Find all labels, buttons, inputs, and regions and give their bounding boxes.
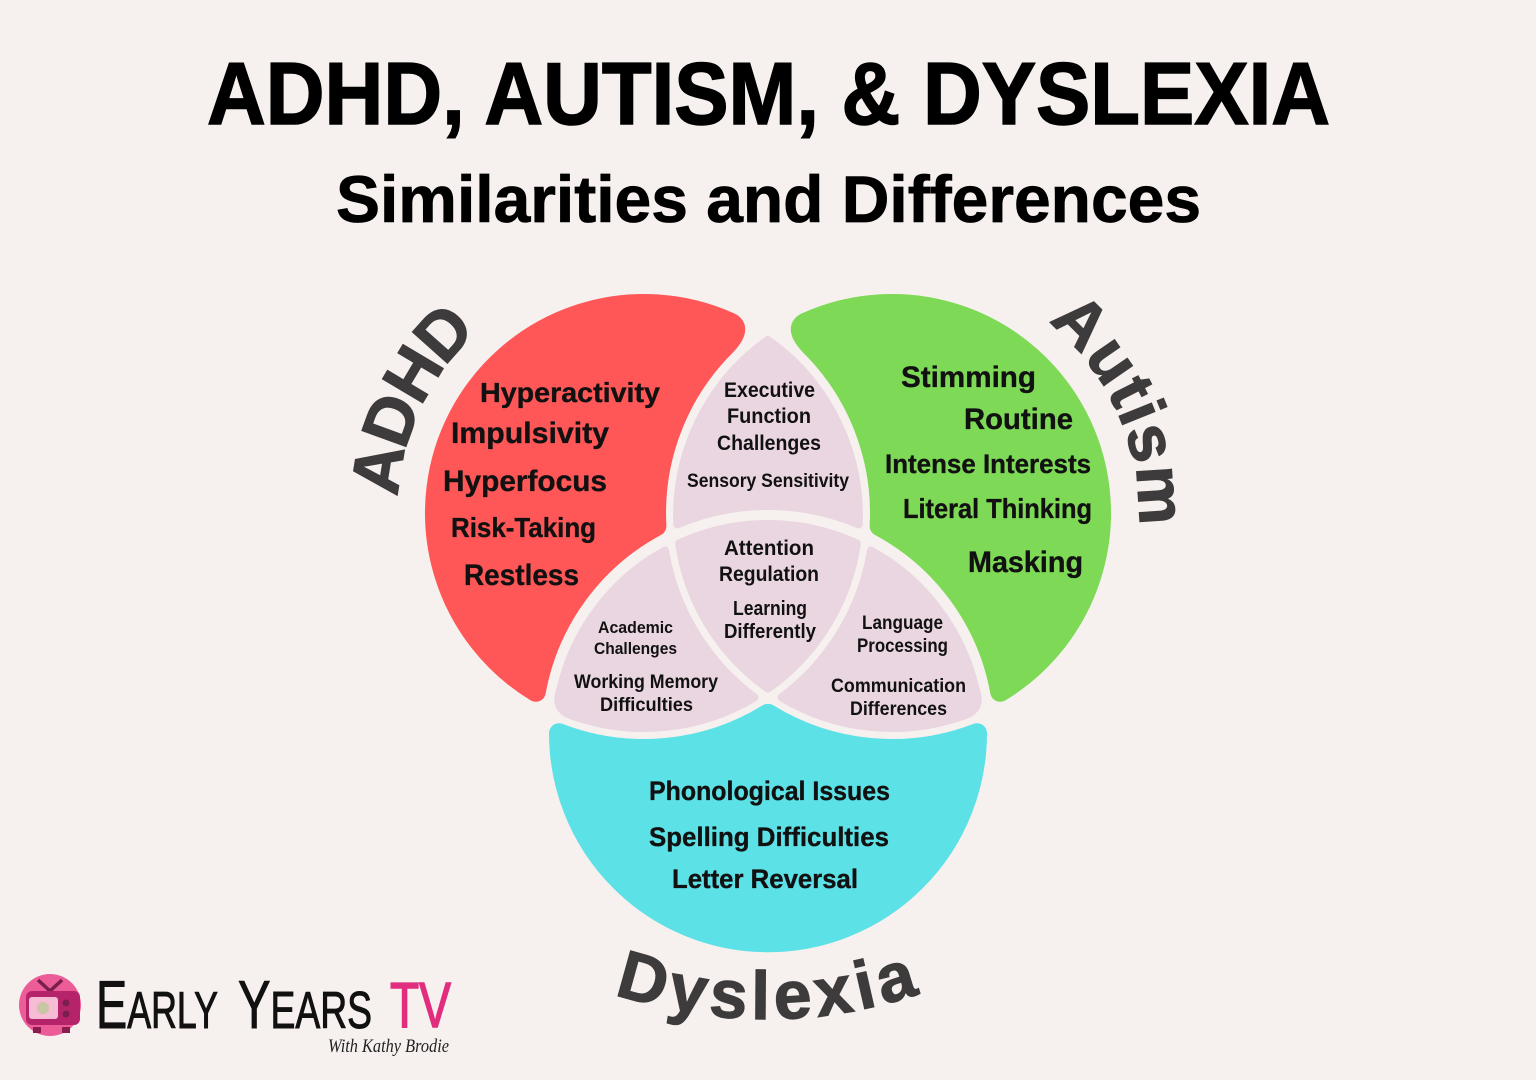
text block: Autism traits: [885, 361, 1092, 579]
subtitle: Similarities and Differences: [336, 162, 1201, 236]
text block: Dyslexia traits: Phonological Issues: [649, 776, 890, 806]
curved label: Dyslexia: Dyslexia: [617, 950, 921, 1026]
text block: ADHD and Autism overlap: Challenges: [717, 432, 821, 455]
tagline: With Kathy Brodie: [328, 1036, 449, 1057]
text block: ADHD traits: [443, 377, 660, 592]
text block: Dyslexia traits: [649, 776, 890, 894]
overlap: ADHD and Dyslexia: [558, 550, 754, 728]
overlap: all three: [679, 524, 857, 689]
text block: Dyslexia traits: Letter Reversal: [672, 864, 858, 894]
text block: shared by all three: Learning: [733, 598, 807, 620]
text block: ADHD and Dyslexia overlap: Difficulties: [600, 695, 693, 716]
overlap: Autism and Dyslexia: [782, 550, 978, 728]
text block: ADHD and Dyslexia overlap: Challenges: [594, 639, 677, 658]
overlap: ADHD and Autism: [677, 340, 859, 524]
text block: ADHD traits: Impulsivity: [451, 417, 609, 450]
panel: Dyslexia circle: [559, 714, 977, 942]
text block: ADHD and Autism overlap: Function: [727, 405, 811, 428]
text block: ADHD and Dyslexia overlap: Working Memory: [574, 672, 718, 693]
text block: Autism traits: Stimming: [901, 361, 1036, 394]
text block: shared by all three: Attention: [724, 537, 814, 560]
text block: Autism and Dyslexia overlap: Language: [862, 613, 943, 634]
text block: ADHD and Dyslexia overlap: Academic: [598, 618, 673, 637]
text block: shared by all three: Regulation: [719, 563, 819, 586]
text block: Autism and Dyslexia overlap: Differences: [850, 699, 947, 720]
text block: ADHD and Autism overlap: [687, 379, 849, 492]
panel: ADHD circle: [435, 304, 735, 692]
title: ADHD, AUTISM, & DYSLEXIA: [207, 44, 1330, 143]
text block: Autism and Dyslexia overlap: Processing: [857, 636, 948, 657]
text block: ADHD traits: Restless: [464, 559, 579, 592]
text block: ADHD and Autism overlap: Executive: [724, 379, 815, 402]
text block: Autism traits: Routine: [964, 403, 1073, 436]
text block: ADHD and Dyslexia overlap: [574, 618, 718, 716]
logo: Early Years TV: [19, 967, 451, 1057]
text block: shared by all three: [719, 537, 819, 643]
text block: Autism and Dyslexia overlap: Communication: [831, 676, 966, 697]
panel: Autism circle: [801, 304, 1101, 692]
text block: shared by all three: Differently: [724, 621, 817, 643]
text block: Dyslexia traits: Spelling Difficulties: [649, 822, 889, 852]
wordmark: TV: TV: [390, 969, 451, 1041]
curved label: Autism: Autism: [1049, 301, 1176, 522]
curved label: ADHD: ADHD: [353, 309, 467, 496]
text block: Autism and Dyslexia overlap: [831, 613, 966, 720]
venn diagram: [435, 304, 1101, 942]
text block: ADHD traits: Risk-Taking: [451, 512, 596, 543]
wordmark: Early: EARLY: [96, 967, 218, 1043]
text block: ADHD traits: Hyperfocus: [443, 465, 607, 498]
icon: television: [19, 974, 81, 1036]
text block: ADHD traits: Hyperactivity: [480, 377, 660, 408]
text block: Autism traits: Literal Thinking: [903, 493, 1092, 524]
text block: ADHD and Autism overlap: Sensory Sensitivity: [687, 471, 849, 492]
text block: Autism traits: Intense Interests: [885, 449, 1091, 479]
text block: Autism traits: Masking: [968, 546, 1083, 579]
wordmark: Years: YEARS: [238, 967, 372, 1043]
